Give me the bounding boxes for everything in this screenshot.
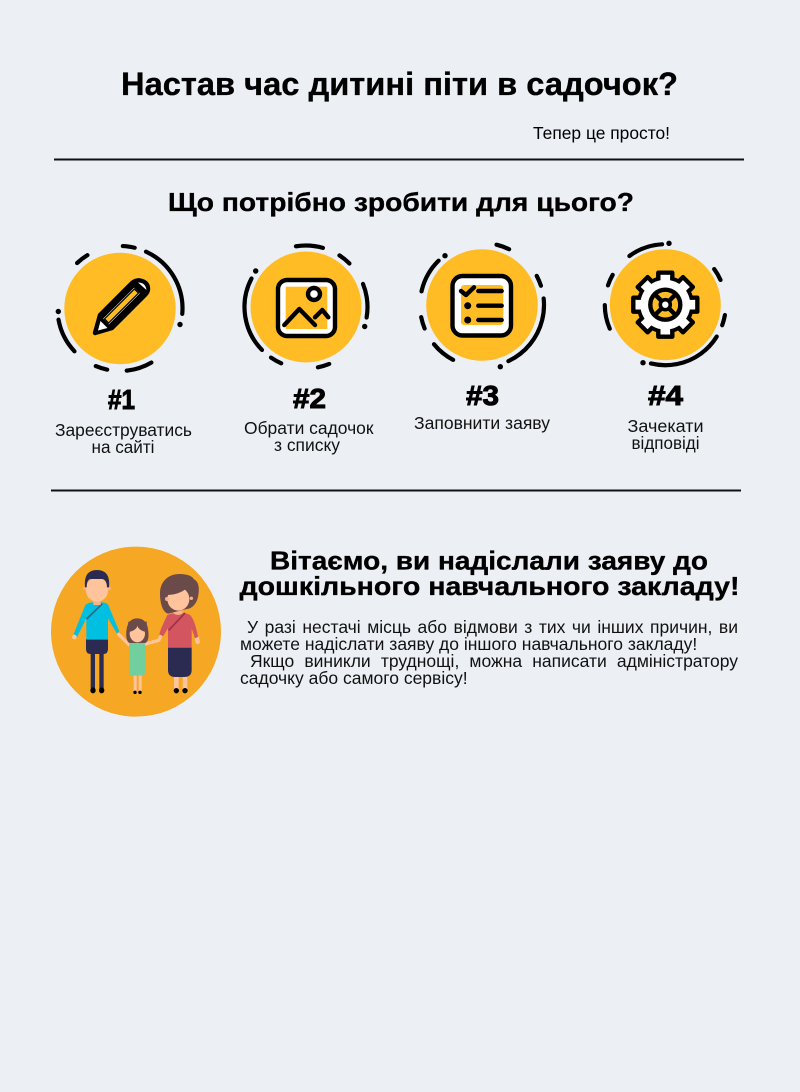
step label: з списку xyxy=(274,435,340,455)
step label xyxy=(55,420,192,457)
section heading: Що потрібно зробити для цього? xyxy=(168,187,634,217)
icon: pencil badge xyxy=(37,225,203,392)
title: Настав час дитині піти в садочок? xyxy=(121,66,678,102)
step label: Зареєструватись xyxy=(55,420,192,440)
welcome paragraph: можете надіслати заяву до іншого навчального закладу! xyxy=(240,634,697,654)
step 4 xyxy=(581,220,750,453)
step label: Зачекати xyxy=(628,416,704,436)
illustration: family xyxy=(51,547,221,717)
step label: на сайті xyxy=(92,437,154,457)
step 1 xyxy=(37,225,203,457)
welcome heading xyxy=(240,546,740,601)
step number: #3 xyxy=(466,380,499,411)
subtitle: Тепер це просто! xyxy=(533,123,670,143)
child xyxy=(119,618,161,694)
step label xyxy=(244,418,374,455)
step label: Обрати садочок xyxy=(244,418,374,438)
step label: відповіді xyxy=(632,433,700,453)
welcome paragraph: У разі нестачі місць або відмови з тих чи інших причин, ви xyxy=(247,617,738,637)
step number: #4 xyxy=(648,380,683,411)
step 2 xyxy=(236,237,376,455)
mother xyxy=(159,574,200,693)
icon: picture badge xyxy=(236,237,376,377)
welcome paragraph: садочку або самого сервісу! xyxy=(240,668,468,688)
welcome paragraph: Якщо виникли труднощі, можна написати адміністратору xyxy=(250,651,738,671)
step 3 xyxy=(407,230,557,433)
step label: Заповнити заяву xyxy=(414,413,550,433)
icon: checklist badge xyxy=(407,230,557,380)
father xyxy=(72,570,119,693)
step number: #1 xyxy=(108,384,135,415)
icon: gear badge xyxy=(581,220,750,389)
welcome paragraph xyxy=(240,617,738,688)
welcome heading: Вітаємо, ви надіслали заяву до xyxy=(270,546,708,576)
step number: #2 xyxy=(293,383,326,414)
welcome heading: дошкільного навчального закладу! xyxy=(240,571,740,601)
step label xyxy=(628,416,704,453)
